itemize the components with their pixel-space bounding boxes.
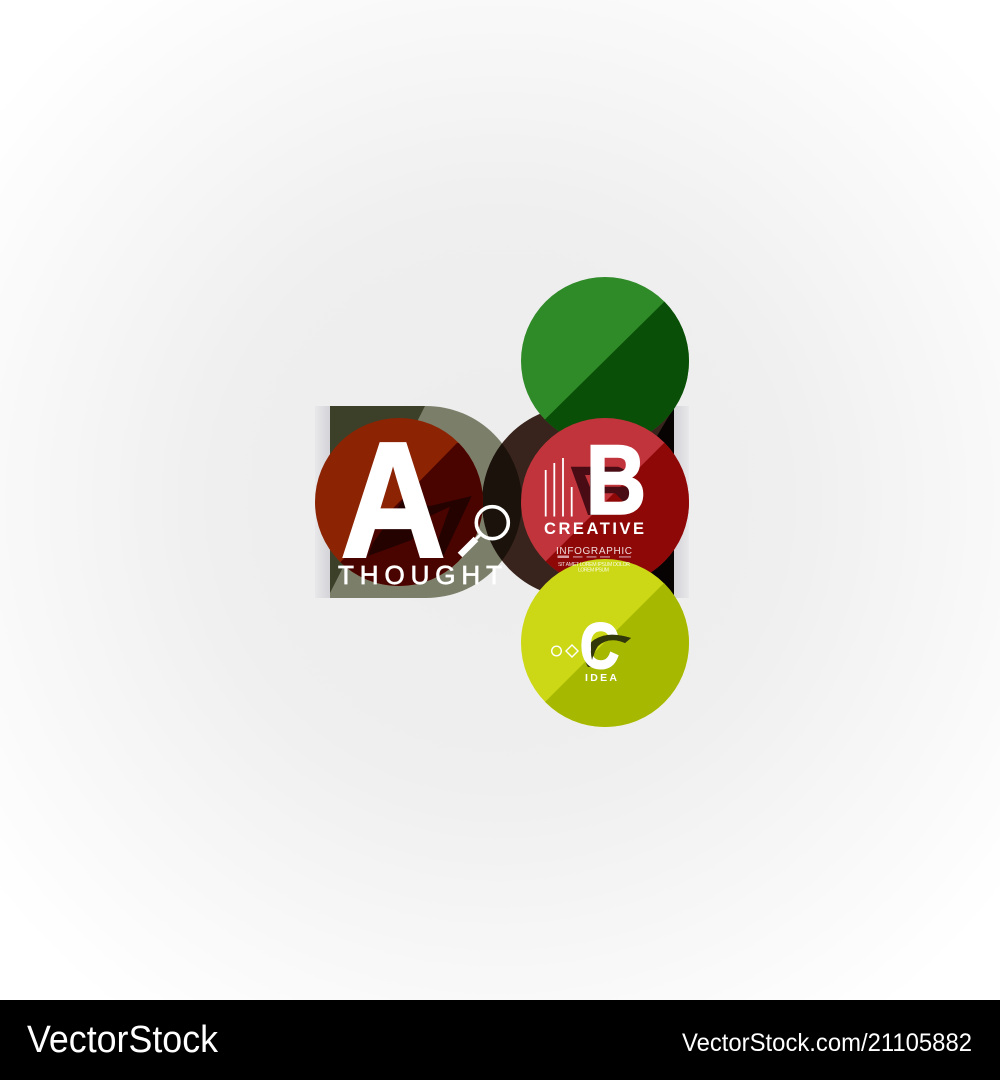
letter B: B (586, 425, 646, 535)
left D panel (316, 406, 502, 598)
circle C (521, 559, 689, 727)
IDEA label: IDEA (585, 672, 617, 684)
green circle (521, 277, 689, 432)
circle B (521, 418, 689, 572)
letter C shadow (585, 635, 631, 667)
INFOGRAPHIC label: INFOGRAPHIC (556, 546, 632, 557)
icon: magnifying glass (460, 507, 508, 555)
letter C: C (580, 610, 619, 682)
footer bar (0, 1000, 1000, 1080)
letter B shadow (571, 467, 631, 515)
bar lines icon (546, 458, 572, 516)
footer logo: VectorStock (27, 1019, 219, 1061)
right D panel (480, 404, 689, 600)
small caption (558, 562, 630, 574)
letter A: A (340, 408, 446, 592)
small caption: LOREM IPSUM (578, 568, 609, 574)
CREATIVE label: CREATIVE (544, 520, 644, 538)
small bars (558, 556, 631, 558)
THOUGHT label: THOUGHT (338, 560, 502, 590)
small caption: SIT AMET LOREM IPSUM DOLOR (558, 562, 630, 568)
circle A (313, 408, 502, 592)
footer id: VectorStock.com/21105882 (682, 1029, 972, 1057)
letter A shadow (368, 496, 472, 557)
icon: circle and diamond (552, 645, 578, 657)
